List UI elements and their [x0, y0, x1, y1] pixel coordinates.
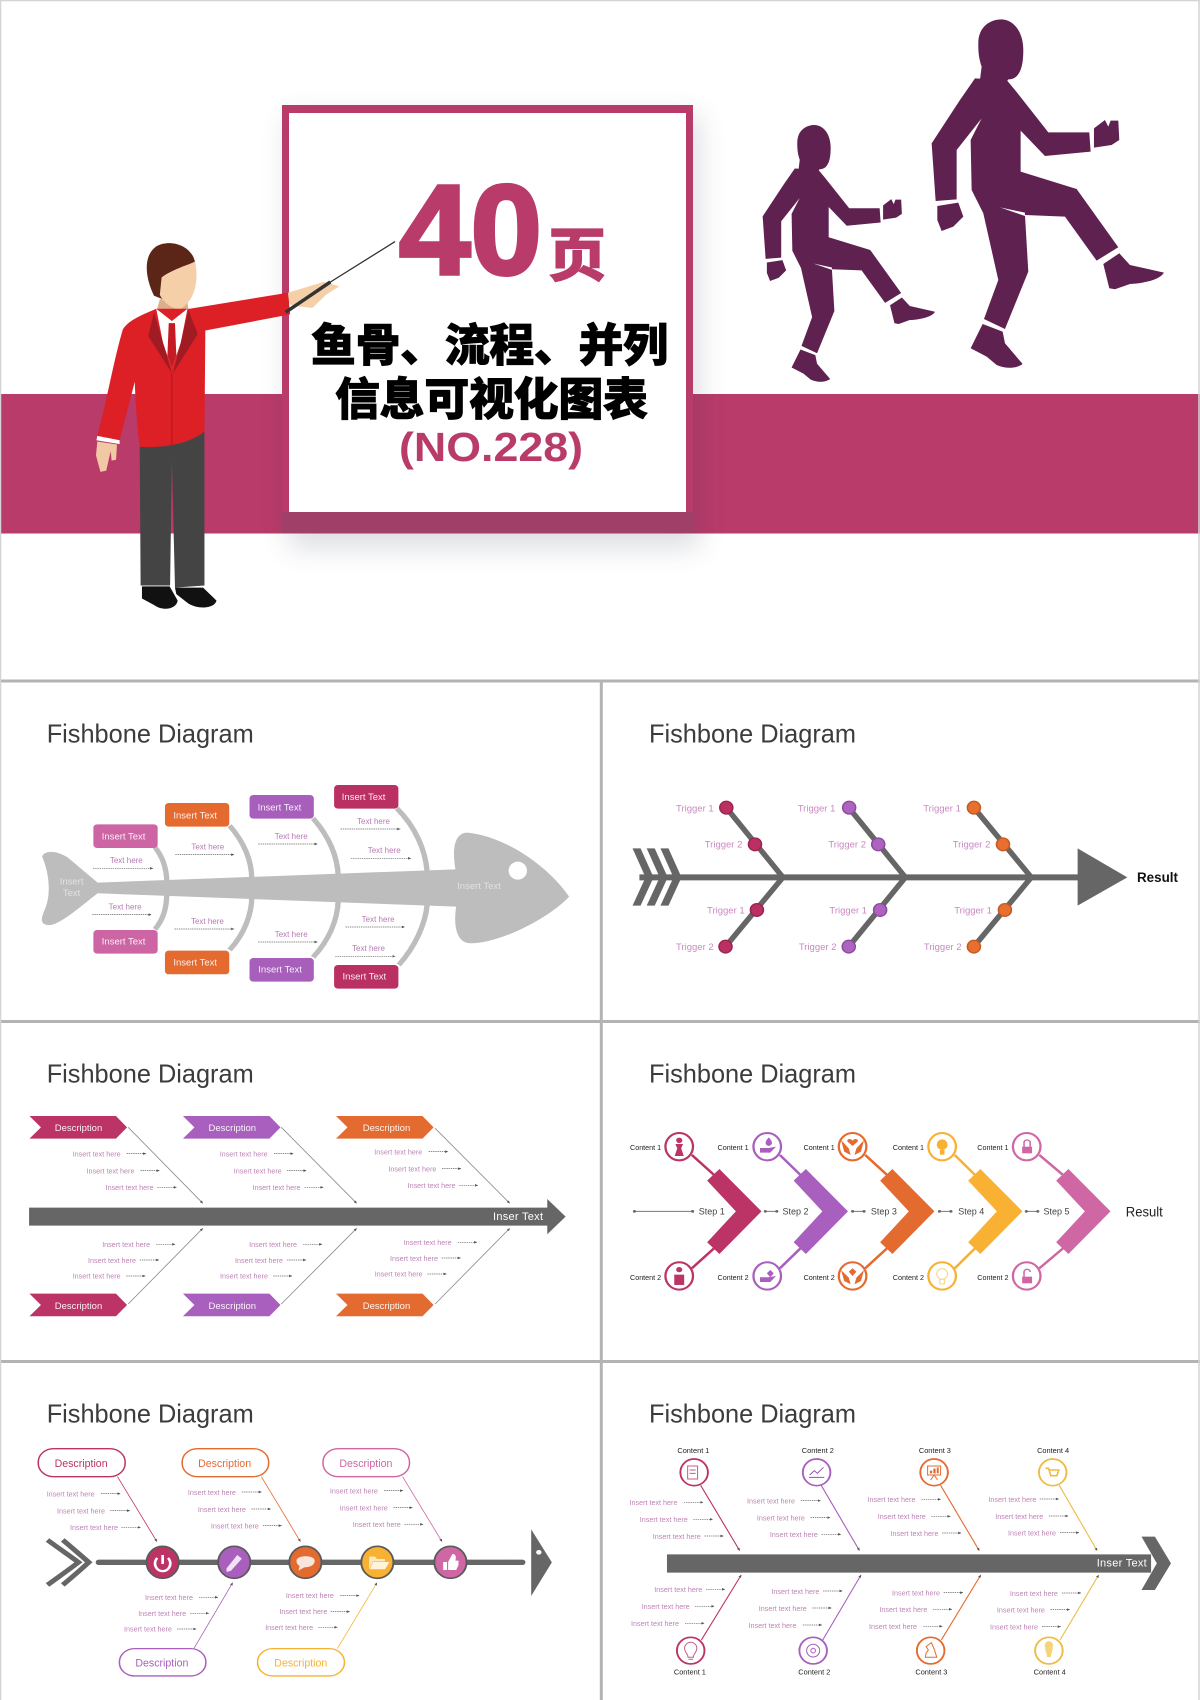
item text: Insert text here [879, 1605, 927, 1614]
content labels: Content 2 [977, 1273, 1008, 1282]
content labels: Content 1 [718, 1143, 749, 1152]
item text: Insert text here [188, 1488, 236, 1497]
step labels: Step 3 [871, 1206, 897, 1216]
bone labels: Text here [191, 842, 225, 852]
box labels: Insert Text [457, 881, 501, 892]
item text: Insert text here [653, 1532, 701, 1541]
item text: Insert text here [102, 1240, 150, 1249]
pill labels: Description [198, 1458, 251, 1470]
item text: Insert text here [771, 1587, 819, 1596]
item text: Insert text here [757, 1514, 805, 1522]
panel: fishbone 2, triggers [633, 719, 1178, 953]
item text: Insert text here [353, 1520, 401, 1529]
trigger labels: Trigger 2 [953, 840, 990, 851]
arrow spine and bones [633, 801, 1127, 953]
item text: Insert text here [770, 1530, 818, 1539]
pill labels: Description [135, 1658, 188, 1670]
item text: Insert text here [286, 1591, 334, 1600]
box labels [60, 792, 501, 983]
panel: fishbone 5, icon timeline [38, 1399, 552, 1676]
item text: Insert text here [747, 1496, 795, 1506]
title: Fishbone Diagram [649, 1399, 856, 1429]
item text: Insert text here [631, 1619, 679, 1628]
trigger labels: Trigger 1 [954, 906, 992, 917]
bone labels: Text here [368, 846, 401, 855]
content labels: Content 2 [804, 1273, 835, 1282]
item text: Insert text here [995, 1512, 1043, 1521]
trigger labels: Trigger 1 [829, 906, 867, 917]
item text: Insert text here [47, 1490, 95, 1498]
title: Fishbone Diagram [47, 1399, 254, 1429]
item text: Insert text here [235, 1256, 283, 1265]
headline number 40: 40 [399, 159, 542, 302]
illustration: walking figures [763, 19, 1164, 382]
trigger labels: Trigger 2 [799, 942, 836, 953]
item text: Insert text here [375, 1270, 423, 1278]
box labels: Insert Text [342, 792, 386, 803]
box labels: Insert Text [342, 972, 386, 983]
box labels: Insert Text [173, 810, 217, 821]
content labels: Content 4 [1034, 1668, 1066, 1676]
item text: Insert text here [868, 1495, 915, 1504]
content labels: Content 2 [893, 1273, 924, 1282]
title: Fishbone Diagram [649, 1059, 856, 1089]
item text: Insert text here [1010, 1589, 1058, 1598]
spine, branches and icons [667, 1459, 1171, 1664]
bone labels: Text here [109, 902, 142, 912]
item text: Insert text here [265, 1623, 313, 1632]
item text: Insert text here [88, 1256, 136, 1265]
item text: Insert text here [390, 1254, 438, 1263]
pill labels: Description [339, 1458, 392, 1470]
box labels: Insert Text [102, 936, 146, 947]
box labels: Insert Text [173, 957, 217, 968]
bone labels: Text here [352, 944, 386, 953]
item text: Insert text here [642, 1602, 690, 1611]
item text: Insert text here [253, 1183, 301, 1192]
tag labels: Description [363, 1123, 410, 1134]
bone labels: Text here [357, 817, 391, 826]
item text: Insert text here [138, 1609, 186, 1618]
trigger labels [676, 803, 992, 953]
tag labels [55, 1123, 410, 1312]
content labels: Content 2 [630, 1273, 661, 1282]
step labels [699, 1206, 1070, 1216]
item text: Insert text here [86, 1166, 134, 1176]
item text: Insert text here [404, 1238, 452, 1247]
item text: Insert text here [124, 1624, 172, 1634]
bone labels: Text here [275, 832, 308, 841]
box labels: Text [63, 888, 81, 899]
title card [282, 105, 693, 533]
item text: Insert text here [330, 1486, 378, 1496]
step labels: Step 5 [1044, 1206, 1070, 1216]
item text: Insert text here [990, 1622, 1038, 1632]
item text: Insert text here [892, 1588, 940, 1598]
trigger labels: Trigger 1 [798, 803, 835, 814]
item text: Insert text here [220, 1150, 268, 1158]
box labels: Insert Text [258, 802, 302, 813]
box labels: Insert [60, 876, 84, 887]
content labels: Content 1 [893, 1143, 924, 1152]
item text: Insert text here [70, 1523, 118, 1532]
item text: Insert text here [654, 1585, 702, 1594]
bone labels: Text here [110, 856, 143, 865]
tag labels: Description [55, 1123, 102, 1134]
item text: Insert text here [340, 1504, 388, 1512]
item text [630, 1495, 1058, 1632]
card shadow [288, 116, 699, 548]
item text: Insert text here [57, 1506, 105, 1516]
box labels: Insert Text [102, 831, 146, 842]
title: Fishbone Diagram [649, 719, 856, 749]
result label: Result [1126, 1204, 1163, 1220]
item text: Insert text here [211, 1522, 259, 1530]
subtitle line 2: 信息可视化图表 [335, 374, 648, 425]
item text [47, 1486, 401, 1634]
illustration: presenter [96, 242, 395, 609]
step labels: Step 2 [782, 1206, 809, 1216]
content labels: Content 2 [802, 1446, 834, 1455]
pill labels [55, 1458, 392, 1670]
trigger labels: Trigger 2 [828, 840, 866, 851]
content labels: Content 4 [1037, 1446, 1069, 1455]
content labels: Content 3 [915, 1668, 947, 1676]
item text: Insert text here [1008, 1528, 1056, 1538]
tag labels: Description [209, 1123, 256, 1134]
spine, tags and branches [29, 1116, 566, 1316]
item text: Insert text here [279, 1607, 327, 1616]
item text: Insert text here [869, 1622, 917, 1631]
content labels: Content 1 [677, 1446, 709, 1455]
content labels: Content 3 [919, 1446, 951, 1455]
panel: fishbone 4, five steps [630, 1059, 1163, 1290]
title: Fishbone Diagram [47, 719, 254, 749]
item text: Insert text here [997, 1606, 1045, 1614]
item text: Insert text here [408, 1181, 456, 1190]
item text: Insert text here [878, 1512, 926, 1521]
item text: Insert text here [388, 1164, 436, 1174]
item text: Insert text here [630, 1498, 677, 1507]
fish skeleton [42, 785, 569, 989]
item text: Insert text here [73, 1150, 121, 1158]
result label: Result [1137, 870, 1178, 885]
content labels: Content 2 [718, 1273, 749, 1282]
item text: Insert text here [759, 1604, 807, 1613]
spine label: Inser Text [493, 1211, 543, 1223]
trigger labels: Trigger 2 [676, 942, 714, 953]
content labels [630, 1143, 1008, 1282]
title: Fishbone Diagram [47, 1059, 254, 1089]
item text: Insert text here [249, 1240, 297, 1249]
tag labels: Description [363, 1301, 410, 1312]
box labels: Insert Text [258, 965, 302, 976]
item text: Insert text here [890, 1529, 938, 1538]
trigger labels: Trigger 2 [924, 942, 962, 953]
item text: Insert text here [374, 1148, 422, 1156]
item text: Insert text here [106, 1183, 154, 1192]
item text: Insert text here [198, 1505, 246, 1514]
bone labels: Text here [191, 917, 224, 926]
step labels: Step 4 [958, 1206, 984, 1216]
item text [73, 1148, 456, 1280]
subtitle line 1: 鱼骨、流程、并列 [311, 320, 668, 371]
panel: hero cover [0, 19, 1200, 609]
panel: fishbone 1, grey fish [42, 719, 569, 989]
panel: fishbone 6, content circles [630, 1399, 1171, 1676]
content labels: Content 1 [804, 1143, 835, 1152]
content labels: Content 1 [674, 1668, 706, 1676]
bone labels [109, 817, 401, 953]
colour band [0, 394, 1200, 534]
trigger labels: Trigger 1 [707, 906, 745, 917]
item text: Insert text here [234, 1166, 282, 1176]
trigger labels: Trigger 2 [705, 840, 742, 851]
content labels: Content 2 [798, 1668, 830, 1676]
spine label: Inser Text [1097, 1558, 1147, 1570]
content labels: Content 1 [977, 1143, 1008, 1152]
item text: Insert text here [145, 1593, 193, 1602]
tag labels: Description [209, 1301, 256, 1312]
trigger labels: Trigger 1 [923, 803, 961, 814]
content labels [674, 1446, 1069, 1676]
trigger labels: Trigger 1 [676, 803, 714, 814]
headline unit: 页 [548, 224, 606, 289]
pill labels: Description [55, 1458, 108, 1470]
chevrons, connectors and icons [633, 1133, 1111, 1290]
serial number: (NO.228) [399, 424, 583, 470]
bone labels: Text here [275, 930, 308, 939]
content labels: Content 1 [630, 1143, 661, 1152]
pill labels: Description [274, 1658, 327, 1670]
item text: Insert text here [748, 1621, 796, 1630]
item text: Insert text here [220, 1272, 268, 1280]
tag labels: Description [55, 1301, 102, 1312]
panel: fishbone 3, description tags [29, 1059, 566, 1316]
timeline, pills and icons [38, 1449, 552, 1676]
bone labels: Text here [362, 915, 395, 924]
step labels: Step 1 [699, 1206, 725, 1216]
item text: Insert text here [73, 1272, 121, 1280]
item text: Insert text here [988, 1495, 1036, 1504]
item text: Insert text here [640, 1515, 688, 1524]
